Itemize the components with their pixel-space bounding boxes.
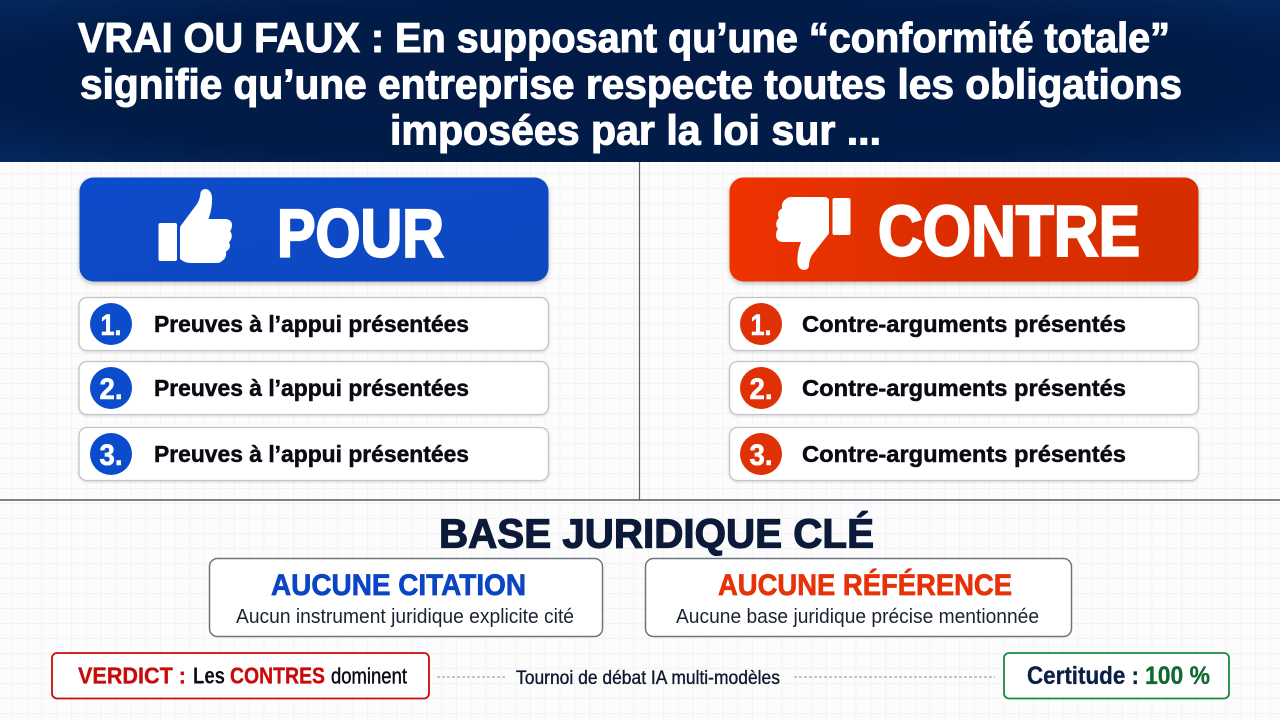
icon: thumbs down bbox=[776, 197, 850, 270]
heading: base juridique clé: BASE JURIDIQUE CLÉ bbox=[439, 510, 874, 556]
pour item 2 bbox=[79, 362, 548, 414]
contre item 3 bbox=[730, 428, 1198, 480]
pour label: POUR bbox=[277, 196, 444, 272]
pour item 3: Preuves à l’appui présentées bbox=[154, 441, 469, 467]
verdict box bbox=[52, 653, 429, 698]
title line 2: signifie qu’une entreprise respecte toutes les obligations bbox=[80, 60, 1182, 108]
panel: contre bbox=[730, 178, 1198, 480]
contre item 2 bbox=[730, 362, 1198, 414]
certainty box: Certitude : bbox=[1027, 662, 1139, 690]
pour item 3 bbox=[79, 428, 548, 480]
card: aucune référence: AUCUNE RÉFÉRENCE bbox=[718, 568, 1012, 602]
verdict box: CONTRES bbox=[230, 662, 325, 688]
pour banner bbox=[80, 178, 548, 282]
contre item 3: Contre-arguments présentés bbox=[802, 441, 1126, 467]
contre banner bbox=[730, 178, 1198, 282]
horizontal divider above legal section bbox=[0, 499, 1280, 501]
verdict box: VERDICT : bbox=[78, 662, 186, 688]
header banner with title bbox=[0, 0, 1280, 162]
contre item 1: Contre-arguments présentés bbox=[802, 311, 1126, 337]
pour item 2: Preuves à l’appui présentées bbox=[154, 375, 469, 401]
title line 3: imposées par la loi sur ... bbox=[390, 106, 881, 154]
panel: pour bbox=[79, 178, 548, 480]
card: aucune citation: Aucun instrument juridique explicite cité bbox=[236, 605, 574, 628]
contre label: CONTRE bbox=[878, 192, 1140, 272]
footer dashed connector left bbox=[437, 676, 505, 678]
pour item 1 bbox=[79, 298, 548, 350]
footer caption: Tournoi de débat IA multi-modèles bbox=[516, 667, 780, 689]
footer dashed connector right bbox=[794, 676, 995, 678]
verdict box: Les bbox=[193, 662, 225, 688]
contre item 1 bbox=[730, 298, 1198, 350]
pour item 1: 1. bbox=[100, 309, 122, 342]
certainty box bbox=[1004, 653, 1229, 698]
contre item 3: 3. bbox=[750, 439, 772, 472]
contre item 1: 1. bbox=[750, 309, 772, 342]
verdict box: dominent bbox=[331, 664, 407, 688]
contre item 2: 2. bbox=[750, 373, 772, 406]
icon: thumbs up bbox=[158, 189, 232, 263]
card: aucune citation: AUCUNE CITATION bbox=[271, 569, 526, 602]
contre item 2: Contre-arguments présentés bbox=[802, 375, 1126, 401]
pour item 2: 2. bbox=[100, 373, 122, 406]
card: aucune référence: Aucune base juridique précise mentionnée bbox=[676, 605, 1039, 628]
title line 1: VRAI OU FAUX : En supposant qu’une “conformité totale” bbox=[78, 14, 1170, 61]
certainty box: 100 % bbox=[1145, 662, 1210, 690]
card: aucune référence bbox=[646, 558, 1072, 636]
pour item 3: 3. bbox=[100, 439, 122, 472]
card: aucune citation bbox=[210, 558, 602, 636]
vertical divider between columns bbox=[638, 162, 640, 500]
pour item 1: Preuves à l’appui présentées bbox=[154, 311, 469, 337]
